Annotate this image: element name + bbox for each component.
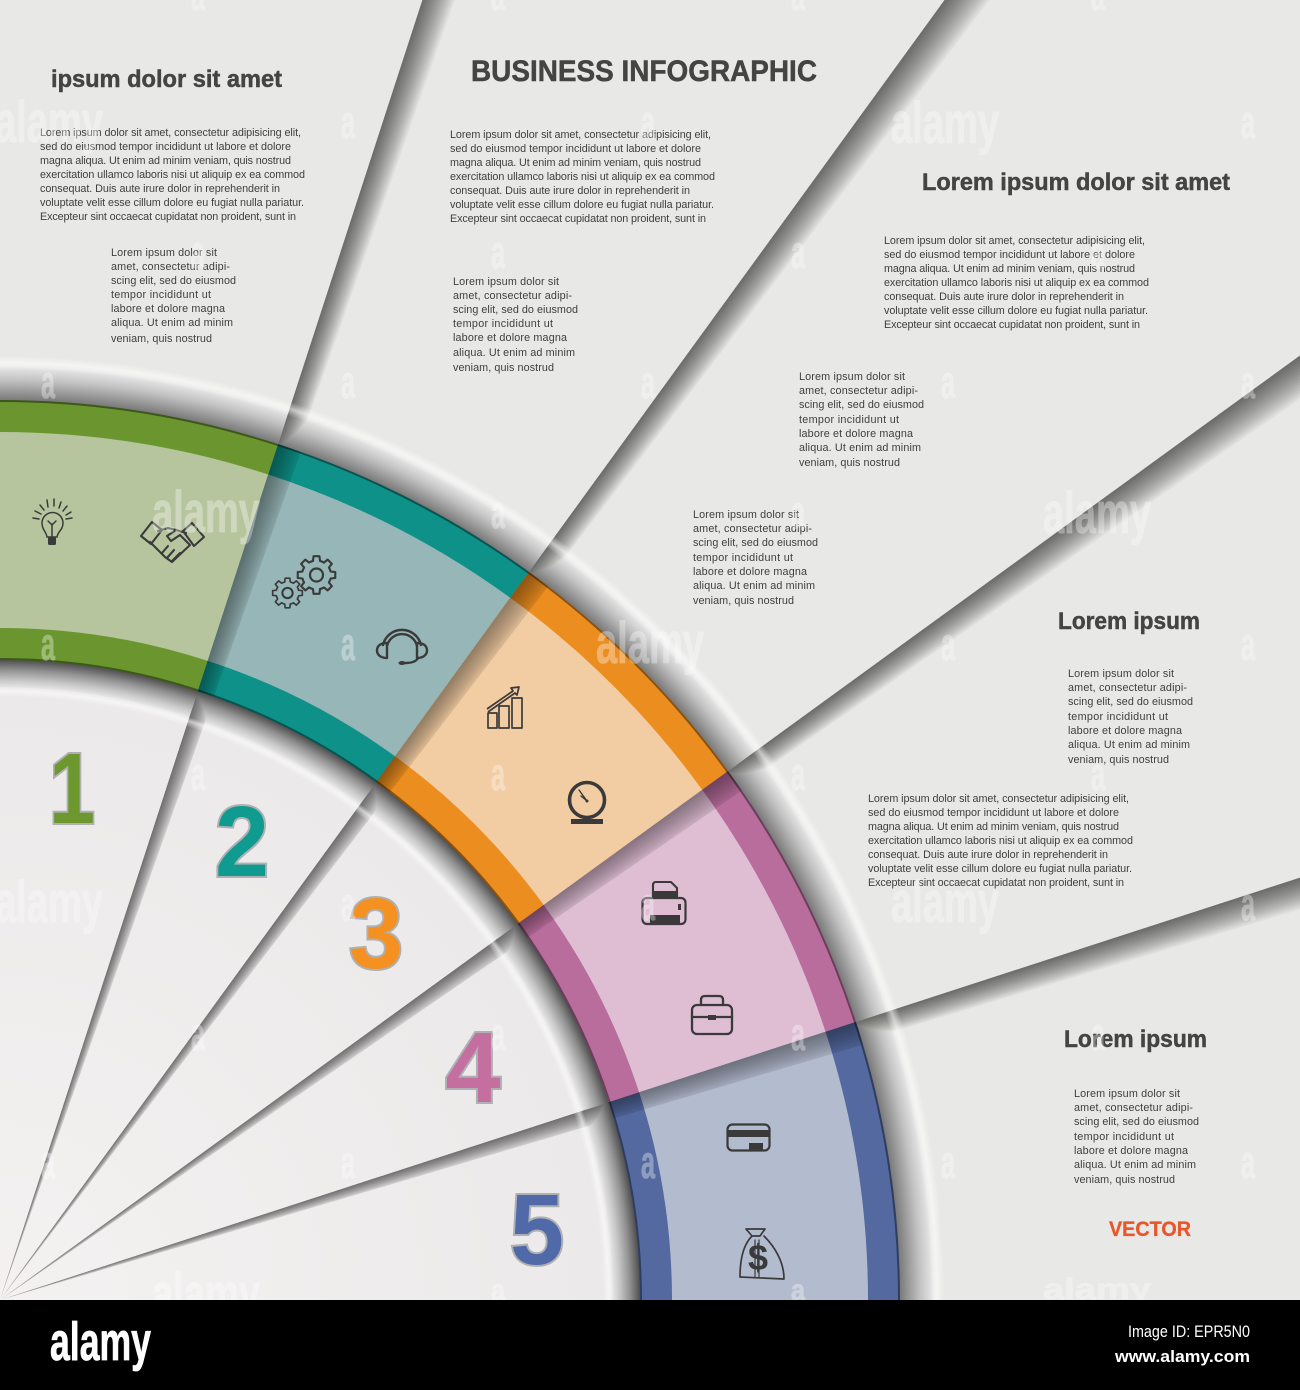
text block: top centre paragraph: [450, 129, 715, 225]
number 2: 2: [215, 786, 269, 898]
stock-photo watermarks: a: [341, 878, 355, 930]
text block: top left paragraph: Lorem ipsum dolor sit amet, consectetur adipisicing elit,: [40, 127, 301, 139]
text block: upper right paragraph: exercitation ullamco laboris nisi ut aliquip ex ea commod: [884, 277, 1149, 289]
number 3: 3: [349, 878, 403, 990]
text block: top centre paragraph: Lorem ipsum dolor sit amet, consectetur adipisicing elit,: [450, 129, 711, 141]
text block: section 2 column: amet, consectetur adipi-: [453, 290, 572, 302]
text block: section 2 column: scing elit, sed do eiusmod: [453, 304, 578, 316]
stock-photo watermarks: a: [1241, 96, 1255, 148]
stock-photo watermarks: a: [641, 1136, 655, 1188]
text block: section 3 upper column: amet, consectetur adipi-: [799, 385, 918, 397]
text block: section 3 lower column: veniam, quis nostrud: [693, 595, 794, 607]
text block: section 5 column: Lorem ipsum dolor sit: [1074, 1088, 1180, 1100]
text block: section 5 column: aliqua. Ut enim ad minim: [1074, 1159, 1196, 1171]
stock-photo watermarks: a: [341, 1136, 355, 1188]
heading: section 3: Lorem ipsum dolor sit amet: [922, 169, 1230, 196]
stock-photo watermarks: a: [791, 748, 805, 800]
text block: section 5 column: veniam, quis nostrud: [1074, 1174, 1175, 1186]
text block: top centre paragraph: consequat. Duis aute irure dolor in reprehenderit in: [450, 185, 690, 197]
icon: printer: [642, 882, 686, 924]
footer logo: alamy: [50, 1312, 151, 1372]
text block: section 5 column: [1074, 1088, 1199, 1186]
band segment 3: orange: [376, 572, 728, 924]
image id: Image ID: EPR5N0: [1128, 1322, 1250, 1341]
heading: section 4: Lorem ipsum: [1058, 608, 1200, 635]
stock-photo watermarks: a: [641, 96, 655, 148]
stock-photo watermarks: alamy: [891, 91, 999, 156]
text block: section 3 lower column: aliqua. Ut enim ad minim: [693, 580, 815, 592]
text block: section 1 column: labore et dolore magna: [111, 303, 225, 315]
stock-photo watermarks: a: [491, 1008, 505, 1060]
text block: section 4 column: amet, consectetur adipi-: [1068, 682, 1187, 694]
text block: section 2 column: veniam, quis nostrud: [453, 362, 554, 374]
text block: section 5 column: labore et dolore magna: [1074, 1145, 1188, 1157]
band segment 1: green: [0, 400, 278, 691]
text block: upper right paragraph: Lorem ipsum dolor sit amet, consectetur adipisicing elit,: [884, 235, 1145, 247]
text block: section 5 column: amet, consectetur adipi-: [1074, 1102, 1193, 1114]
text block: top left paragraph: Excepteur sint occaecat cupidatat non proident, sunt in: [40, 211, 296, 223]
text block: lower right paragraph: Excepteur sint occaecat cupidatat non proident, sunt in: [868, 877, 1124, 889]
icon: growth chart: [487, 687, 522, 728]
text block: section 3 upper column: labore et dolore magna: [799, 428, 913, 440]
stock-photo watermarks: a: [1091, 748, 1105, 800]
text block: upper right paragraph: consequat. Duis aute irure dolor in reprehenderit in: [884, 291, 1124, 303]
icon: gears: [273, 556, 335, 608]
stock-photo watermarks: a: [941, 618, 955, 670]
text block: section 3 upper column: Lorem ipsum dolor sit: [799, 371, 905, 383]
stock-photo watermarks: a: [1091, 226, 1105, 278]
stock-photo watermarks: a: [791, 1274, 805, 1307]
text block: top centre paragraph: sed do eiusmod tempor incididunt ut labore et dolore: [450, 143, 701, 155]
stock-photo watermarks: a: [41, 618, 55, 670]
number 5: 5: [510, 1174, 564, 1286]
stock-photo watermarks: a: [1091, 1008, 1105, 1060]
radial separators inside the band: [0, 698, 603, 1300]
band segment 2: teal: [198, 444, 529, 782]
icon: credit card: [727, 1124, 770, 1151]
vector label: VECTOR: [1109, 1218, 1191, 1241]
stock-photo watermarks: a: [41, 1136, 55, 1188]
stock-photo watermarks: alamy: [596, 611, 704, 676]
icon: light bulb: [33, 499, 72, 545]
stock-photo watermarks: a: [341, 356, 355, 408]
stock-photo watermarks: a: [491, 1274, 505, 1307]
text block: section 1 column: tempor incididunt ut: [111, 289, 211, 301]
text block: top left paragraph: voluptate velit esse cillum dolore eu fugiat nulla pariatur.: [40, 197, 304, 209]
stock-photo watermarks: a: [641, 878, 655, 930]
text block: top left paragraph: exercitation ullamco laboris nisi ut aliquip ex ea commod: [40, 169, 305, 181]
text block: section 3 upper column: aliqua. Ut enim ad minim: [799, 442, 921, 454]
band segment 5: blue: [609, 1022, 900, 1300]
text block: lower right paragraph: [868, 793, 1133, 889]
text block: lower right paragraph: voluptate velit esse cillum dolore eu fugiat nulla pariatur.: [868, 863, 1132, 875]
text block: section 1 column: scing elit, sed do eiusmod: [111, 275, 236, 287]
text block: section 3 lower column: [693, 509, 818, 607]
text block: section 1 column: aliqua. Ut enim ad minim: [111, 317, 233, 329]
text block: section 3 lower column: amet, consectetur adipi-: [693, 523, 812, 535]
stock-photo watermarks: a: [1241, 618, 1255, 670]
icon: headset: [377, 630, 427, 665]
text block: top left paragraph: consequat. Duis aute irure dolor in reprehenderit in: [40, 183, 280, 195]
stock-photo watermarks: a: [491, 486, 505, 538]
text block: top left paragraph: magna aliqua. Ut enim ad minim veniam, quis nostrud: [40, 155, 291, 167]
stock-photo watermarks: a: [341, 618, 355, 670]
text block: section 2 column: aliqua. Ut enim ad minim: [453, 347, 575, 359]
text block: section 4 column: veniam, quis nostrud: [1068, 754, 1169, 766]
text block: section 3 upper column: [799, 371, 924, 469]
stock-photo watermarks: a: [491, 226, 505, 278]
stock-photo watermarks: alamy: [152, 1262, 260, 1327]
small gear: [273, 578, 302, 608]
stock-photo watermarks: a: [1241, 878, 1255, 930]
number 1: 1: [49, 733, 95, 845]
text block: upper right paragraph: voluptate velit esse cillum dolore eu fugiat nulla pariatur.: [884, 305, 1148, 317]
text block: section 3 upper column: scing elit, sed do eiusmod: [799, 399, 924, 411]
text block: section 4 column: labore et dolore magna: [1068, 725, 1182, 737]
stock-photo watermarks: alamy: [891, 870, 999, 935]
text block: lower right paragraph: exercitation ullamco laboris nisi ut aliquip ex ea commod: [868, 835, 1133, 847]
text block: upper right paragraph: magna aliqua. Ut enim ad minim veniam, quis nostrud: [884, 263, 1135, 275]
text block: section 1 column: veniam, quis nostrud: [111, 333, 212, 345]
text block: section 3 upper column: tempor incididunt ut: [799, 414, 899, 426]
stock-photo watermarks: a: [341, 96, 355, 148]
text block: section 3 lower column: scing elit, sed do eiusmod: [693, 537, 818, 549]
text block: section 1 column: amet, consectetur adipi-: [111, 261, 230, 273]
stock-photo watermarks: a: [191, 748, 205, 800]
stock-photo watermarks: a: [791, 486, 805, 538]
text block: section 4 column: scing elit, sed do eiusmod: [1068, 696, 1193, 708]
stock-photo watermarks: a: [191, 226, 205, 278]
stock-photo watermarks: a: [1241, 1136, 1255, 1188]
title: BUSINESS INFOGRAPHIC: [471, 55, 817, 88]
radial separators beyond the band: [278, 0, 1300, 1031]
text block: upper right paragraph: Excepteur sint occaecat cupidatat non proident, sunt in: [884, 319, 1140, 331]
stock-photo watermarks: alamy: [1043, 1273, 1151, 1306]
text block: section 4 column: Lorem ipsum dolor sit: [1068, 668, 1174, 680]
curved five-colour band: [0, 400, 900, 1300]
text block: lower right paragraph: consequat. Duis aute irure dolor in reprehenderit in: [868, 849, 1108, 861]
text block: lower right paragraph: magna aliqua. Ut enim ad minim veniam, quis nostrud: [868, 821, 1119, 833]
text block: section 2 column: Lorem ipsum dolor sit: [453, 276, 559, 288]
text block: section 4 column: [1068, 668, 1193, 766]
text block: top left paragraph: sed do eiusmod tempor incididunt ut labore et dolore: [40, 141, 291, 153]
band segment 4: pink: [518, 771, 856, 1102]
text block: top centre paragraph: Excepteur sint occaecat cupidatat non proident, sunt in: [450, 213, 706, 225]
stock-photo watermarks: a: [791, 1008, 805, 1060]
icon: briefcase: [692, 996, 732, 1034]
text block: section 1 column: Lorem ipsum dolor sit: [111, 247, 217, 259]
dark band edge lines: [0, 401, 899, 1300]
stock-photo watermarks: a: [191, 1008, 205, 1060]
heading: section 1: ipsum dolor sit amet: [51, 66, 282, 93]
text block: top centre paragraph: magna aliqua. Ut enim ad minim veniam, quis nostrud: [450, 157, 701, 169]
stock-photo watermarks: a: [641, 356, 655, 408]
text block: section 2 column: tempor incididunt ut: [453, 318, 553, 330]
text block: top centre paragraph: voluptate velit esse cillum dolore eu fugiat nulla pariatur.: [450, 199, 714, 211]
text block: lower right paragraph: Lorem ipsum dolor sit amet, consectetur adipisicing elit,: [868, 793, 1129, 805]
website: www.alamy.com: [1114, 1347, 1250, 1366]
footer strip: [0, 1300, 1300, 1390]
text block: section 3 lower column: labore et dolore magna: [693, 566, 807, 578]
stock-photo watermarks: a: [41, 356, 55, 408]
overlap shadows where each segment falls on the next: [198, 444, 862, 1118]
stock-photo watermarks: a: [491, 748, 505, 800]
stock-photo watermarks: alamy: [152, 480, 260, 545]
text block: top centre paragraph: exercitation ullamco laboris nisi ut aliquip ex ea commod: [450, 171, 715, 183]
text block: lower right paragraph: sed do eiusmod tempor incididunt ut labore et dolore: [868, 807, 1119, 819]
stock-photo watermarks: a: [941, 356, 955, 408]
text block: section 4 column: tempor incididunt ut: [1068, 711, 1168, 723]
heading: section 5: Lorem ipsum: [1064, 1026, 1207, 1053]
stock-photo watermarks: a: [1241, 356, 1255, 408]
text block: section 2 column: labore et dolore magna: [453, 332, 567, 344]
text block: upper right paragraph: [884, 235, 1149, 331]
icon: money bag: $: [748, 1237, 768, 1278]
number 4: 4: [446, 1012, 501, 1124]
text block: top left paragraph: [40, 127, 305, 223]
icon: money bag: [740, 1229, 784, 1279]
text block: section 4 column: aliqua. Ut enim ad minim: [1068, 739, 1190, 751]
large gear: [298, 556, 335, 594]
icon: handshake: [141, 522, 204, 562]
icon: clock: [570, 782, 604, 824]
text block: upper right paragraph: sed do eiusmod tempor incididunt ut labore et dolore: [884, 249, 1135, 261]
stock-photo watermarks: alamy: [1043, 481, 1151, 546]
text block: section 5 column: tempor incididunt ut: [1074, 1131, 1174, 1143]
text block: section 3 upper column: veniam, quis nostrud: [799, 457, 900, 469]
text block: section 3 lower column: tempor incididunt ut: [693, 552, 793, 564]
text block: section 2 column: [453, 276, 578, 374]
text block: section 3 lower column: Lorem ipsum dolor sit: [693, 509, 799, 521]
text block: section 5 column: scing elit, sed do eiusmod: [1074, 1116, 1199, 1128]
text block: section 1 column: [111, 247, 236, 345]
stock-photo watermarks: a: [791, 226, 805, 278]
stock-photo watermarks: a: [941, 1136, 955, 1188]
